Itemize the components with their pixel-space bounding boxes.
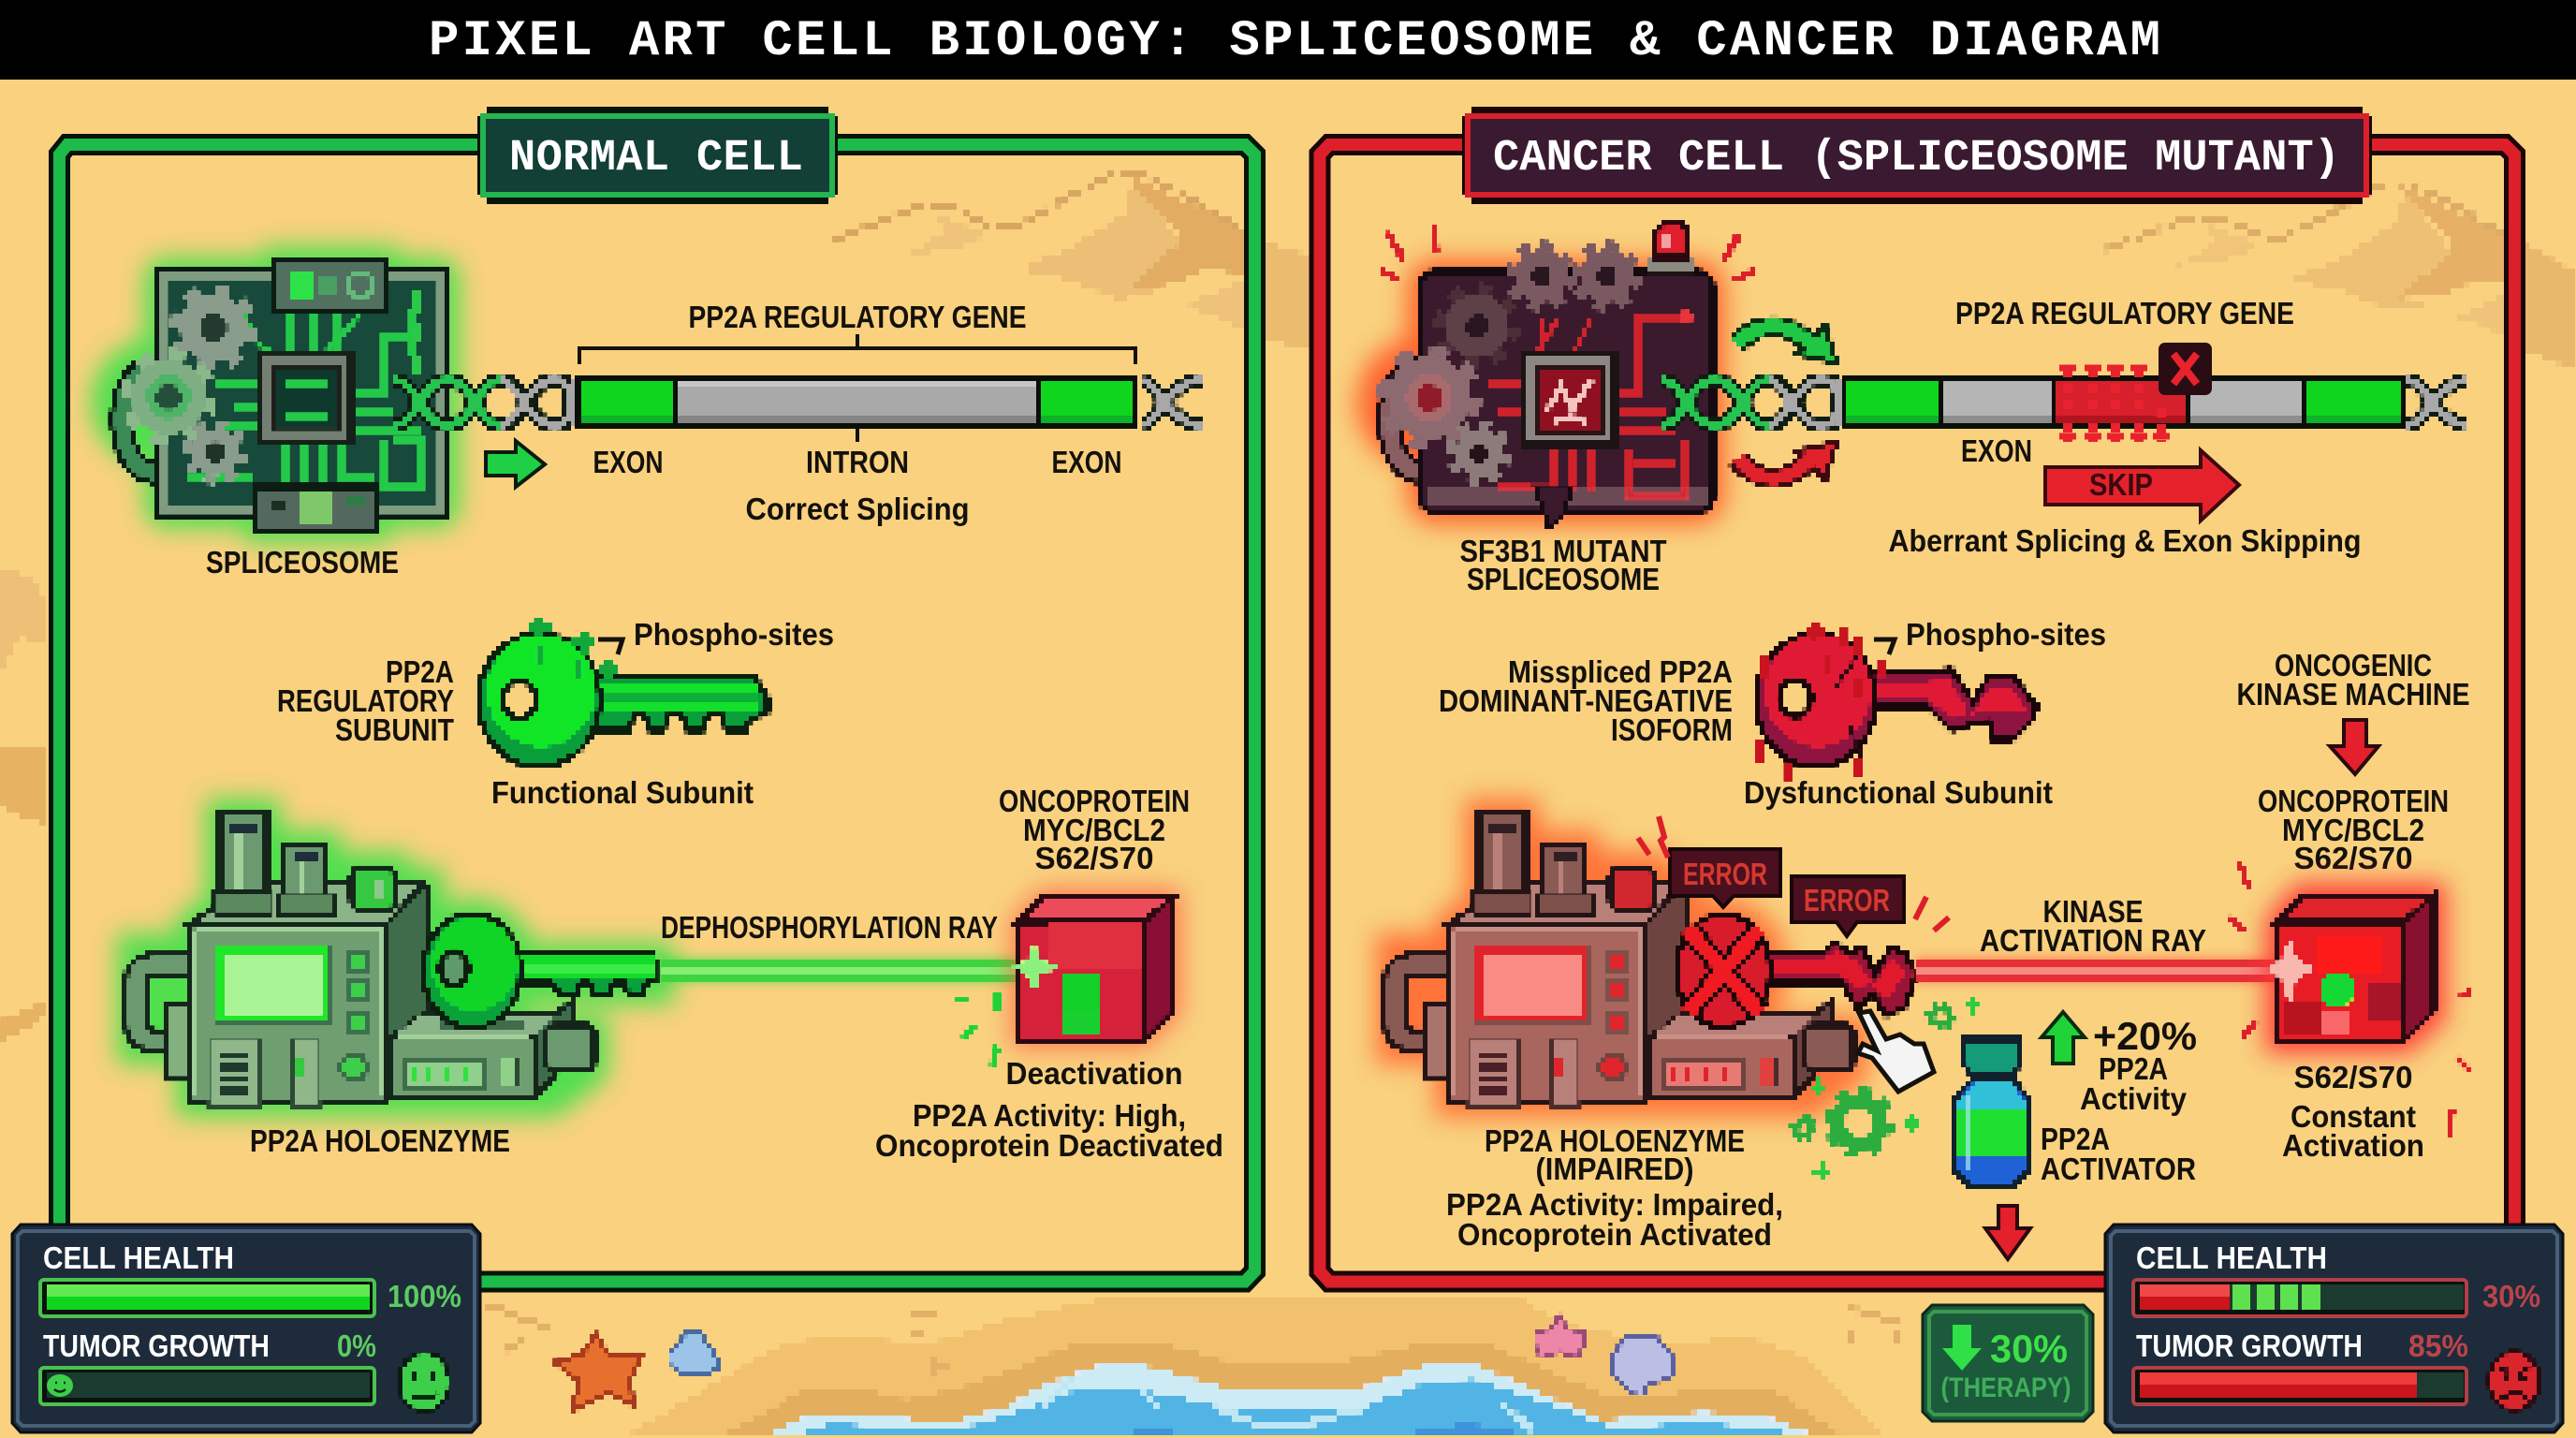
label: holoenzyme: PP2A HOLOENZYME	[250, 1123, 510, 1158]
label: oncoprotein: ONCOPROTEIN	[2258, 784, 2449, 818]
arrow: kinase to oncoprotein	[2330, 720, 2378, 774]
arrow: to therapy	[1985, 1206, 2030, 1259]
icon: functional key	[478, 618, 768, 767]
stat: 30%: 30%	[2482, 1279, 2540, 1313]
arrow: reduction	[1942, 1325, 1982, 1371]
label: oncoprotein: S62/S70	[2293, 841, 2413, 875]
icon: spliceosome	[103, 258, 447, 531]
phospho-sites callout: Phospho-sites	[1906, 617, 2106, 652]
label: activity	[2080, 1051, 2188, 1116]
label: activator: PP2A	[2041, 1122, 2110, 1156]
dna strand	[394, 380, 1201, 425]
stat: +20%: +20%	[2093, 1014, 2197, 1058]
label: oncogenic kinase machine: KINASE MACHINE	[2237, 677, 2469, 712]
heading: cancer cell: CANCER CELL (SPLICEOSOME MUTANT)	[1493, 134, 2340, 183]
bar: tumor growth 85%	[2133, 1368, 2466, 1404]
stat: 85%: 85%	[2408, 1328, 2468, 1363]
red panel frame	[1320, 144, 2514, 1282]
label: oncogenic kinase machine: ONCOGENIC	[2275, 648, 2432, 682]
panel: normal cell	[60, 107, 1254, 1282]
label: misspliced isoform: ISOFORM	[1611, 712, 1733, 747]
icon: green gears and sparkles	[1792, 995, 1981, 1181]
gene bar: aberrant	[1842, 368, 2406, 442]
callout: error 2	[1792, 876, 1904, 936]
dna strand	[1661, 380, 2468, 425]
icon: happy face	[399, 1353, 449, 1411]
icon: angry face	[2489, 1352, 2539, 1410]
label: impaired holoenzyme: PP2A HOLOENZYME	[1485, 1123, 1745, 1158]
icon: PP2A activator vial	[1954, 1039, 2029, 1185]
caption: impaired activity: PP2A Activity: Impaired,	[1446, 1187, 1783, 1222]
label: therapy: (THERAPY)	[1941, 1372, 2071, 1403]
beach bands	[622, 1299, 1884, 1438]
label: mutant spliceosome: SPLICEOSOME	[1467, 562, 1660, 596]
label: cell health: CELL HEALTH	[2136, 1240, 2327, 1275]
label: exon: EXON	[1052, 445, 1121, 479]
caption: impaired activity	[1446, 1187, 1783, 1252]
caption: correct splicing: Correct Splicing	[745, 492, 970, 526]
icon: exon error badge	[2159, 343, 2212, 395]
icon: oncoprotein cube activated	[2228, 861, 2471, 1137]
caption: aberrant splicing: Aberrant Splicing & Exon Skipping	[1889, 523, 2361, 558]
decoration: pink starfish	[1535, 1315, 1585, 1357]
arrow: activity up	[2042, 1012, 2085, 1064]
label: mutant spliceosome	[1460, 534, 1666, 596]
caption: functional subunit: Functional Subunit	[491, 775, 754, 810]
HUD: normal cell	[12, 1225, 480, 1432]
therapy stat box	[1923, 1305, 2093, 1421]
icon: misfit key with red X	[1676, 915, 1916, 1027]
label: activity: Activity	[2080, 1081, 2188, 1116]
label: regulatory subunit: REGULATORY	[277, 683, 454, 718]
kinase activation ray	[1916, 957, 2291, 983]
label: tumor growth: TUMOR GROWTH	[2136, 1328, 2363, 1363]
title bar	[0, 0, 2576, 80]
label: regulatory subunit: PP2A	[386, 654, 454, 689]
caption: constant activation: Constant	[2291, 1099, 2416, 1134]
gene bar: exon intron exon	[575, 375, 1137, 442]
stat: 30%: 30%	[1990, 1327, 2068, 1371]
heading: normal cell: NORMAL CELL	[509, 134, 803, 183]
label: deactivation: Deactivation	[1005, 1056, 1183, 1091]
label: regulatory subunit: SUBUNIT	[335, 712, 454, 747]
icon: cursor hand	[1858, 1011, 1934, 1092]
label: intron: INTRON	[806, 445, 909, 479]
label: oncoprotein: MYC/BCL2	[1023, 813, 1165, 847]
decoration: white shell	[1614, 1337, 1673, 1395]
callout: error 1	[1670, 849, 1780, 907]
label: activator	[2041, 1122, 2196, 1186]
arrow: curved red	[1737, 442, 1837, 479]
caption: high activity: PP2A Activity: High,	[913, 1098, 1186, 1133]
label: exon: EXON	[1961, 433, 2032, 468]
warning sparks	[1638, 816, 1949, 931]
label: misspliced isoform: Misspliced PP2A	[1508, 654, 1733, 689]
decoration: starfish	[555, 1334, 641, 1411]
phospho-sites callout: Phospho-sites	[634, 617, 834, 652]
title bar: PIXEL ART CELL BIOLOGY: SPLICEOSOME & CANCER DIAGRAM	[429, 13, 2160, 70]
label: gene name: PP2A REGULATORY GENE	[689, 300, 1026, 334]
icon: mutant spliceosome	[1368, 223, 1755, 529]
gene bracket	[579, 334, 1135, 364]
label: impaired holoenzyme	[1485, 1123, 1745, 1186]
arrow: skip	[2045, 450, 2239, 521]
dephosphorylation ray	[661, 957, 1035, 983]
heading: normal cell	[477, 107, 838, 204]
label: oncogenic kinase machine	[2237, 648, 2469, 712]
icon: dysfunctional key	[1756, 623, 2037, 782]
callout: error 2: ERROR	[1804, 883, 1890, 917]
label: regulatory subunit	[277, 654, 454, 747]
label: activity: PP2A	[2099, 1051, 2168, 1086]
icon: impaired holoenzyme machine	[1390, 813, 1853, 1107]
stat: 100%: 100%	[388, 1279, 461, 1313]
caption: constant activation	[2282, 1099, 2424, 1163]
label: misspliced isoform: DOMINANT-NEGATIVE	[1439, 683, 1733, 718]
callout: error 1: ERROR	[1683, 857, 1767, 891]
arrow: splicing direction	[486, 441, 545, 487]
label: oncoprotein: S62/S70	[1035, 841, 1153, 875]
bar: cell health 30%	[2133, 1280, 2466, 1316]
icon: PP2A holoenzyme machine	[131, 813, 660, 1107]
decoration: blue shell	[669, 1331, 718, 1373]
green panel frame	[60, 144, 1254, 1282]
label: gene name: PP2A REGULATORY GENE	[1955, 296, 2294, 330]
label: ray: DEPHOSPHORYLATION RAY	[661, 910, 998, 945]
dunes right panel	[2101, 183, 2516, 338]
label: oncoprotein: MYC/BCL2	[2282, 813, 2424, 847]
icon: oncoprotein cube deactivated	[953, 896, 1174, 1065]
label: impaired holoenzyme: (IMPAIRED)	[1535, 1152, 1694, 1186]
label: spliceosome: SPLICEOSOME	[206, 545, 399, 580]
label: tumor growth: TUMOR GROWTH	[43, 1328, 270, 1363]
label: kinase ray: ACTIVATION RAY	[1980, 923, 2206, 958]
caption: constant activation: Activation	[2282, 1128, 2424, 1163]
label: activator: ACTIVATOR	[2041, 1152, 2196, 1186]
label: oncoprotein	[999, 784, 1190, 875]
bar: tumor growth 0%	[40, 1368, 374, 1404]
label: s62/s70: S62/S70	[2293, 1060, 2413, 1094]
caption: high activity: Oncoprotein Deactivated	[875, 1128, 1223, 1163]
label: misspliced isoform	[1439, 654, 1733, 747]
arrow: skip: SKIP	[2089, 467, 2153, 502]
stat: 0%: 0%	[337, 1328, 376, 1363]
label: cell health: CELL HEALTH	[43, 1240, 234, 1275]
label: kinase ray: KINASE	[2042, 894, 2144, 929]
arrow: curved green	[1737, 326, 1837, 363]
icon: key docked in machine	[423, 914, 657, 1030]
heading: cancer cell	[1462, 107, 2372, 204]
caption: high activity	[875, 1098, 1223, 1163]
label: oncoprotein	[2258, 784, 2449, 875]
caption: impaired activity: Oncoprotein Activated	[1457, 1217, 1772, 1252]
dunes left panel	[830, 173, 1245, 328]
label: oncoprotein: ONCOPROTEIN	[999, 784, 1190, 818]
bar: cell health 100%	[40, 1280, 374, 1316]
panel: cancer cell	[1320, 107, 2514, 1282]
label: exon: EXON	[593, 445, 663, 479]
HUD: cancer cell	[2105, 1225, 2563, 1432]
label: kinase ray	[1980, 894, 2206, 958]
caption: dysfunctional subunit: Dysfunctional Subunit	[1744, 775, 2053, 810]
label: mutant spliceosome: SF3B1 MUTANT	[1460, 534, 1666, 568]
